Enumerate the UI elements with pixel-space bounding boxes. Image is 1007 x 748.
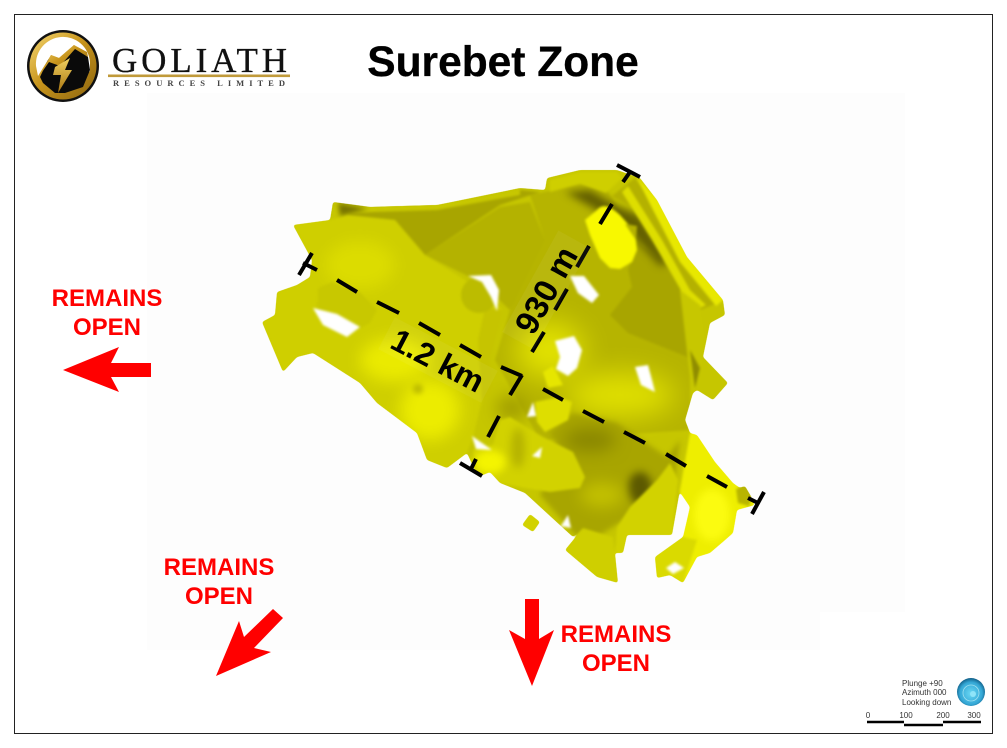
- view orientation legend and scale bar: [860, 674, 992, 733]
- logo subtitle: RESOURCES LIMITED: [113, 78, 285, 88]
- ball in hole 2: [461, 280, 494, 313]
- lower left lobe: [473, 417, 585, 492]
- bottom sheet: [565, 528, 618, 583]
- right rim: [550, 174, 619, 194]
- flap: [615, 463, 678, 553]
- upper centre lobe fragment: [535, 397, 572, 432]
- shading clipped to sheet: [262, 172, 723, 553]
- lobe under hole: [496, 396, 528, 420]
- small satellite blob: [522, 514, 540, 532]
- arrow: left: [63, 347, 151, 392]
- dark band by upper hole: [565, 190, 670, 266]
- scale bar: [866, 711, 981, 725]
- title: Surebet Zone: [367, 39, 639, 86]
- upper bright oval: [585, 206, 637, 269]
- dimension line: 930 m: [460, 165, 640, 476]
- text: remains open: OPEN: [185, 583, 253, 610]
- arrow: down: [509, 599, 554, 686]
- arrow: down-left: [216, 609, 283, 676]
- text: remains open: REMAINS: [52, 285, 162, 312]
- label: 930 m: 930 m: [507, 240, 585, 340]
- rim notch detail: [682, 298, 700, 394]
- central panel: [425, 202, 545, 310]
- text: remains open: OPEN: [582, 650, 650, 677]
- scale bar: 0: [866, 711, 871, 720]
- text: remains open: REMAINS: [561, 621, 671, 648]
- bright centre band: [516, 322, 584, 378]
- ball in hole 1: [328, 284, 362, 297]
- callout: remains open west: [52, 285, 162, 392]
- text: remains open: REMAINS: [164, 554, 274, 581]
- scale bar: 300: [967, 711, 981, 720]
- main sheet: [262, 170, 728, 553]
- view parameters: Plunge +90: [902, 679, 943, 688]
- top dark panel: [330, 190, 540, 255]
- view parameters: Azimuth 000: [902, 688, 947, 697]
- logo emblem: [27, 30, 99, 102]
- logo: Goliath Resources Limited: [27, 30, 290, 102]
- ore body 3D model: [262, 170, 755, 583]
- scale bar: 100: [899, 711, 913, 720]
- icon: orientation globe: [957, 678, 985, 706]
- callout: remains open southwest: [164, 554, 283, 676]
- scale bar: 200: [936, 711, 950, 720]
- logo gold rule: [108, 74, 290, 77]
- lower right bright lobe: [655, 433, 755, 583]
- holes: [313, 275, 655, 528]
- lobe A, left: [262, 215, 503, 468]
- text: remains open: OPEN: [73, 314, 141, 341]
- dimension line: 1.2 km: [299, 253, 764, 514]
- callout: remains open south: [509, 599, 671, 686]
- logo wordmark: GOLIATH: [112, 41, 287, 80]
- lower central dark lobe: [540, 413, 680, 535]
- view parameters: Looking down: [902, 698, 951, 707]
- label: 1.2 km: 1.2 km: [385, 321, 490, 399]
- right dark panel: [610, 242, 690, 358]
